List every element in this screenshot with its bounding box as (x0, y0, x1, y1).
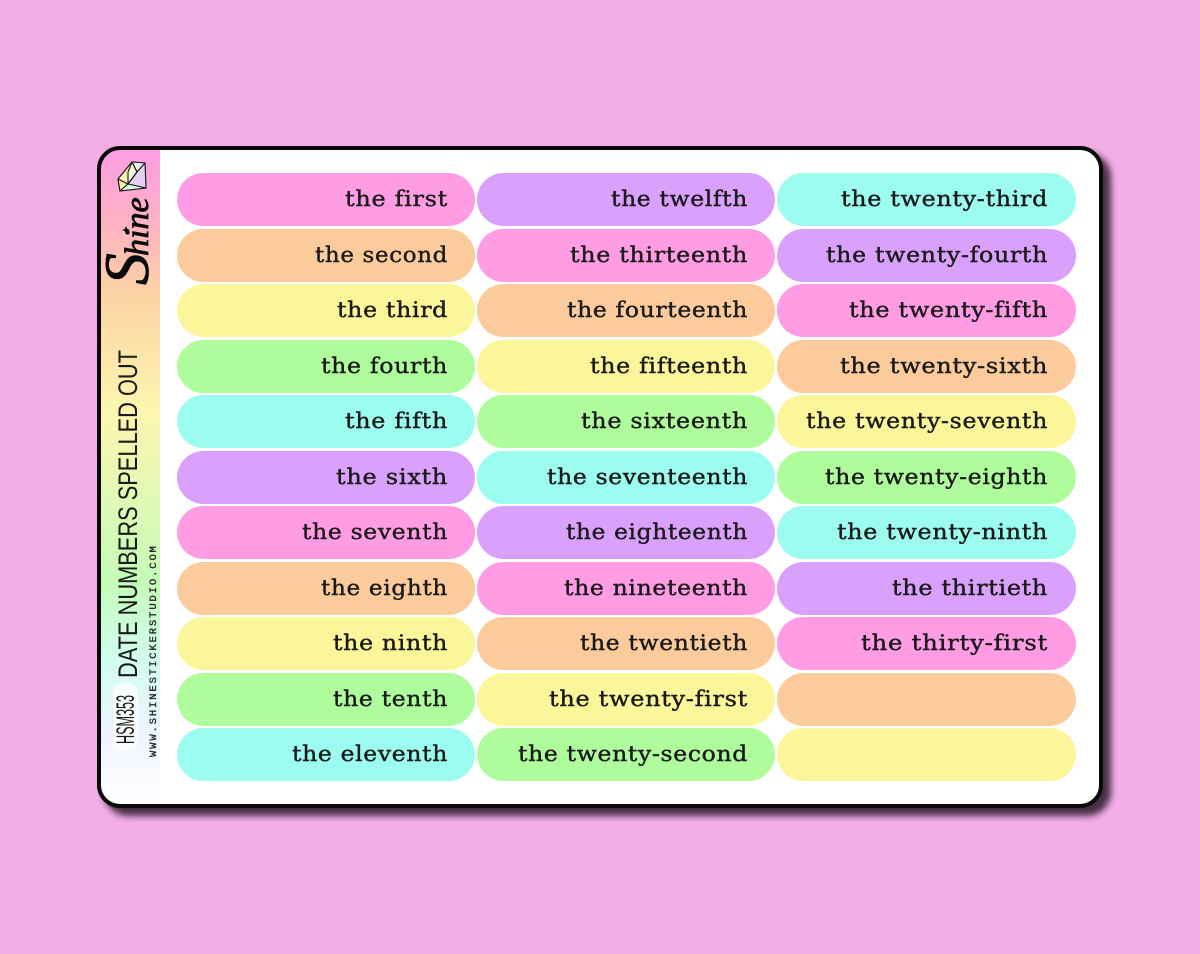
icon: diamond logo (118, 162, 146, 191)
sticker: the fifth: the fifth (345, 409, 448, 433)
sticker: blank yellow (777, 728, 1076, 781)
sticker: the thirteenth (477, 229, 775, 282)
sticker: the fourteenth (477, 284, 775, 337)
sticker: the tenth (177, 673, 475, 726)
sticker: the twelfth: the twelfth (611, 187, 748, 211)
sticker: the twenty-third (777, 173, 1076, 226)
card shadow (104, 153, 1111, 816)
sticker: the twenty-seventh (777, 395, 1076, 448)
sticker: blank orange (777, 673, 1076, 726)
website url: WWW.SHINESTICKERSTUDIO.COM (148, 546, 160, 757)
sticker: the nineteenth: the nineteenth (564, 576, 748, 600)
sticker: the thirtieth: the thirtieth (892, 576, 1048, 600)
sticker: the fourteenth: the fourteenth (567, 298, 748, 322)
brand logo: Shine: Shine (91, 197, 162, 285)
product code badge (112, 683, 140, 751)
sticker: the third (177, 284, 475, 337)
sticker: the tenth: the tenth (333, 687, 448, 711)
sticker: the fourth (177, 340, 475, 393)
column 2 stickers (477, 173, 775, 781)
sticker: the twentieth: the twentieth (580, 631, 748, 655)
sticker: the twenty-ninth (777, 506, 1076, 559)
sticker: the twenty-first (477, 673, 775, 726)
column 1 stickers (177, 173, 475, 781)
sticker: the second: the second (315, 243, 448, 267)
sticker: the twenty-second (477, 728, 775, 781)
sticker: the eighth (177, 562, 475, 615)
sticker: the sixth: the sixth (336, 465, 448, 489)
sticker: the fifteenth (477, 340, 775, 393)
sidebar title: DATE NUMBERS SPELLED OUT (113, 350, 143, 678)
sticker: the seventeenth: the seventeenth (547, 465, 748, 489)
sticker: the eighteenth (477, 506, 775, 559)
sticker: the ninth (177, 617, 475, 670)
sticker: the twentieth (477, 617, 775, 670)
sticker: the twenty-fifth (777, 284, 1076, 337)
sticker: the seventh (177, 506, 475, 559)
sticker: the eleventh (177, 728, 475, 781)
sticker: the twenty-second: the twenty-second (518, 742, 748, 766)
sticker: the twenty-ninth: the twenty-ninth (837, 520, 1048, 544)
sticker: the eighteenth: the eighteenth (566, 520, 748, 544)
sticker: the first: the first (345, 187, 448, 211)
sticker: the twenty-third: the twenty-third (841, 187, 1048, 211)
sticker: the thirtieth (777, 562, 1076, 615)
sticker: the twenty-fifth: the twenty-fifth (849, 298, 1048, 322)
sticker: the twelfth (477, 173, 775, 226)
sticker: the second (177, 229, 475, 282)
icon: star dot (122, 226, 130, 234)
sticker sheet (99, 148, 1101, 806)
sticker: the fifth (177, 395, 475, 448)
product code badge: HSM353 (112, 695, 140, 744)
sticker: the thirty-first: the thirty-first (861, 631, 1048, 655)
sticker: the thirty-first (777, 617, 1076, 670)
sticker: the sixth (177, 451, 475, 504)
sticker: the twenty-first: the twenty-first (549, 687, 748, 711)
sticker: the sixteenth: the sixteenth (581, 409, 748, 433)
sticker: the thirteenth: the thirteenth (570, 243, 748, 267)
column 3 stickers (777, 173, 1076, 781)
sticker: the eleventh: the eleventh (292, 742, 448, 766)
sticker: the twenty-eighth (777, 451, 1076, 504)
sticker: the twenty-sixth (777, 340, 1076, 393)
sticker: the twenty-sixth: the twenty-sixth (840, 354, 1048, 378)
sticker: the seventeenth (477, 451, 775, 504)
sidebar gradient strip (99, 148, 160, 806)
sticker: the sixteenth (477, 395, 775, 448)
sticker: the seventh: the seventh (302, 520, 448, 544)
sticker: the fifteenth: the fifteenth (590, 354, 748, 378)
sticker: the first (177, 173, 475, 226)
sticker: the twenty-fourth: the twenty-fourth (826, 243, 1048, 267)
sticker: the eighth: the eighth (321, 576, 448, 600)
sticker: the twenty-fourth (777, 229, 1076, 282)
sticker: the twenty-seventh: the twenty-seventh (806, 409, 1048, 433)
sticker: the fourth: the fourth (321, 354, 448, 378)
sticker: the nineteenth (477, 562, 775, 615)
sticker: the third: the third (337, 298, 448, 322)
sticker: the twenty-eighth: the twenty-eighth (825, 465, 1048, 489)
sticker: the ninth: the ninth (333, 631, 448, 655)
